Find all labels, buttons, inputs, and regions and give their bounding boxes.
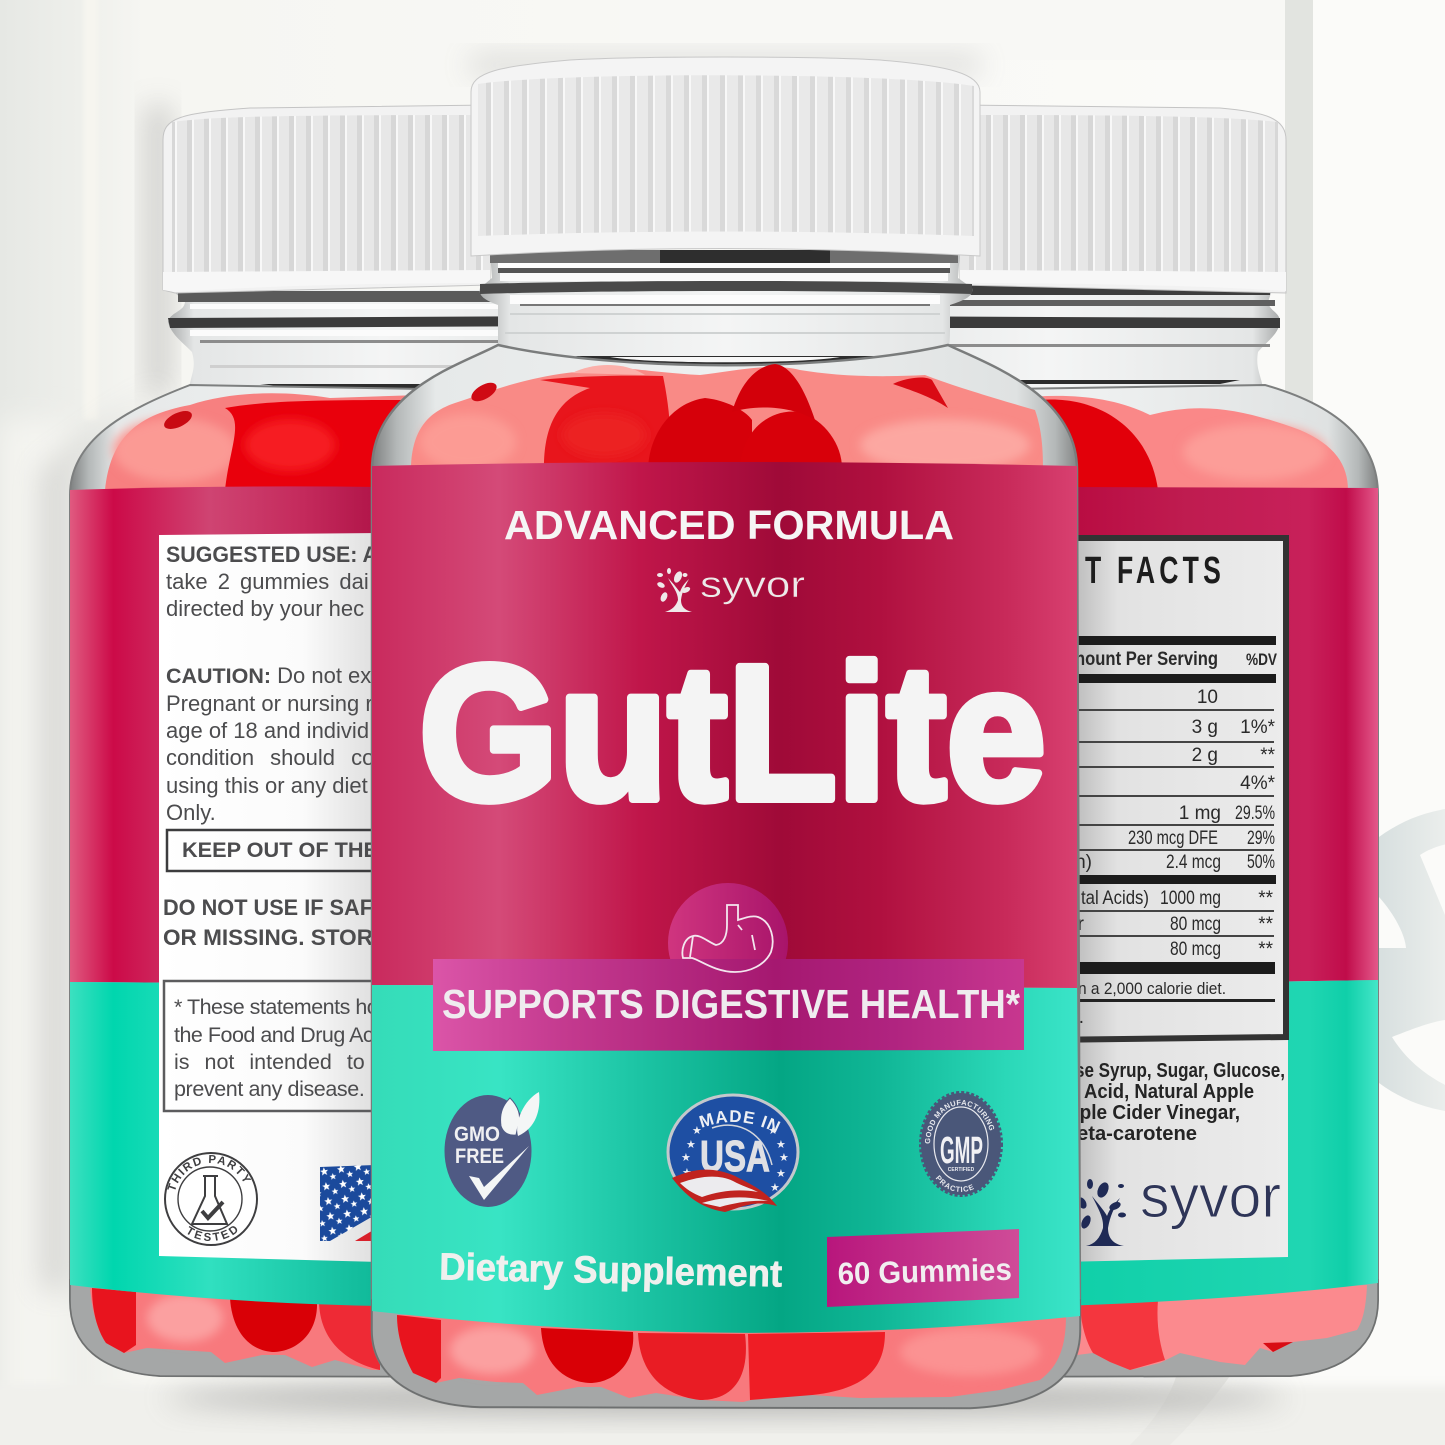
facts table: 2 g <box>1192 745 1218 766</box>
bottom glass base <box>372 1300 1080 1408</box>
icon: third party tested: TESTED <box>188 1226 238 1241</box>
icon: made in USA badge: MADE IN <box>699 1110 780 1133</box>
disclaimer box: the Food and Drug Ac <box>174 1023 374 1047</box>
suggested use text: SUGGESTED USE: A <box>166 542 378 567</box>
facts table: hount Per Serving <box>1075 649 1218 670</box>
icon: made in USA badge: ★ <box>681 1152 691 1164</box>
crimson label <box>70 486 380 984</box>
keep out box <box>167 830 387 871</box>
dietary supplement: Dietary Supplement <box>439 1246 783 1296</box>
gummies count box: 60 Gummies <box>837 1252 1012 1291</box>
product name: GutLite <box>419 625 1046 840</box>
facts table: 230 mcg DFE <box>1128 828 1218 849</box>
grey facts panel <box>1060 537 1288 1262</box>
icon: third party tested <box>164 1152 258 1246</box>
facts table: 3 g <box>1192 717 1218 738</box>
teal label <box>70 982 380 1306</box>
white back panel <box>159 533 380 1262</box>
icon: stomach <box>682 905 773 972</box>
caution text: using this or any diet <box>166 773 368 798</box>
crimson label <box>372 462 1077 988</box>
icon: made in USA badge: ★ <box>779 1152 789 1164</box>
facts table: 4%* <box>1240 773 1276 794</box>
syvor logo dark: syvor <box>1140 1163 1281 1230</box>
gummies top <box>1000 396 1348 490</box>
syvor logo <box>656 564 805 612</box>
facts table: 29.5% <box>1235 803 1275 824</box>
gummies count box <box>827 1229 1019 1307</box>
benefit banner: SUPPORTS DIGESTIVE HEALTH* <box>442 981 1020 1027</box>
disclaimer box: is not intended to <box>174 1050 365 1074</box>
icon: made in USA badge: ★ <box>682 1167 692 1179</box>
facts table: r <box>1078 914 1085 935</box>
suggested use text: take 2 gummies dai <box>166 569 369 594</box>
facts table: n) <box>1075 852 1092 873</box>
crimson label <box>1060 487 1378 985</box>
bottom glass base <box>820 1280 1378 1377</box>
facts table: 1000 mg <box>1160 888 1221 909</box>
facts table: 1 mg <box>1179 803 1221 824</box>
do not use warning: OR MISSING. STOR <box>163 925 373 950</box>
icon: made in USA badge: ★ <box>776 1139 786 1151</box>
cap <box>163 105 490 293</box>
caution text <box>166 663 374 825</box>
facts table: . <box>1079 1007 1084 1028</box>
caution text: Pregnant or nursing r <box>166 691 373 716</box>
facts table: 2.4 mcg <box>1166 852 1221 873</box>
icon: made in USA badge: ★ <box>776 1168 786 1180</box>
facts table: 80 mcg <box>1170 939 1221 960</box>
cap <box>471 57 980 256</box>
icon: made in USA badge <box>666 1094 800 1212</box>
glass neck <box>480 250 972 368</box>
icon: GMO free badge <box>444 1092 539 1207</box>
decorative wheel <box>1317 807 1445 1113</box>
cap <box>960 105 1286 293</box>
left bottle <box>69 104 498 1378</box>
icon: GMP badge: CERTIFIED <box>948 1167 975 1173</box>
gummies bottom <box>90 1288 380 1370</box>
facts table <box>1060 636 1278 1028</box>
icon: made in USA badge: ★ <box>768 1125 778 1137</box>
ingredients text: pple Cider Vinegar, <box>1068 1102 1240 1124</box>
disclaimer box <box>164 981 386 1111</box>
teal label <box>372 985 1080 1333</box>
facts table: 80 mcg <box>1170 914 1221 935</box>
facts heading: T FACTS <box>1085 550 1225 592</box>
icon: GMO free badge: GMO <box>454 1123 500 1146</box>
glass body <box>372 345 1080 1408</box>
do not use warning: DO NOT USE IF SAF <box>163 895 373 920</box>
icon: third party tested: THIRD PARTY <box>167 1155 252 1190</box>
facts table: %DV <box>1246 650 1278 669</box>
syvor logo: syvor <box>700 564 805 605</box>
facts table: 1%* <box>1240 717 1276 738</box>
syvor logo dark <box>1076 1163 1281 1246</box>
icon: GMP badge: GMP <box>940 1130 983 1172</box>
center bottle <box>370 56 1082 1410</box>
icon: GMP badge <box>919 1091 1003 1197</box>
gummies bottom <box>1060 1285 1367 1372</box>
icon: flag <box>320 1165 375 1241</box>
caution text: condition should co <box>166 745 374 770</box>
facts table: 10 <box>1197 687 1218 708</box>
disclaimer box: prevent any disease. <box>174 1077 364 1101</box>
facts table: ** <box>1258 914 1274 935</box>
gummies top <box>105 393 420 490</box>
teal label <box>1060 980 1378 1306</box>
icon: GMO free badge: FREE <box>455 1145 504 1168</box>
icon: made in USA badge: USA <box>700 1132 770 1181</box>
keep out box: KEEP OUT OF THE <box>182 838 378 862</box>
advanced formula: ADVANCED FORMULA <box>504 502 954 548</box>
facts table: ** <box>1260 745 1276 766</box>
benefit banner <box>433 959 1024 1051</box>
glass body <box>70 385 600 1377</box>
glass body <box>820 385 1378 1377</box>
facts table: 50% <box>1247 852 1275 873</box>
facts table: ** <box>1258 939 1274 960</box>
icon: GMP badge: GOOD MANUFACTURING <box>924 1100 994 1144</box>
facts table: n a 2,000 calorie diet. <box>1078 979 1226 998</box>
supplement facts border <box>1040 538 1286 1040</box>
glass neck <box>820 281 1280 395</box>
icon: made in USA badge: ★ <box>770 1182 780 1194</box>
gummies bottom <box>397 1315 1066 1402</box>
disclaimer box: * These statements ho <box>174 995 379 1019</box>
icon: made in USA badge: ★ <box>686 1139 696 1151</box>
bottom glass base <box>70 1280 600 1377</box>
caution text: Only. <box>166 800 216 825</box>
stomach backing circle <box>668 883 788 1003</box>
gummies top <box>411 364 1043 471</box>
facts table: ** <box>1258 888 1274 909</box>
icon: GMP badge: PRACTICE <box>936 1175 974 1192</box>
ingredients text: se Syrup, Sugar, Glucose, <box>1075 1060 1285 1082</box>
glass neck <box>168 290 600 395</box>
right bottle <box>820 105 1378 1377</box>
facts table: 29% <box>1247 828 1275 849</box>
suggested use text <box>166 542 378 621</box>
caution text: CAUTION: Do not ex <box>166 663 371 688</box>
ingredients text: Acid, Natural Apple <box>1084 1081 1254 1103</box>
caution text: age of 18 and individ <box>166 718 369 743</box>
ingredients text: eta-carotene <box>1077 1123 1197 1145</box>
facts table: tal Acids) <box>1081 888 1149 909</box>
suggested use text: directed by your hec <box>166 596 364 621</box>
icon: made in USA badge: ★ <box>692 1125 702 1137</box>
ingredients text <box>1068 1060 1285 1145</box>
do not use warning <box>163 895 373 950</box>
